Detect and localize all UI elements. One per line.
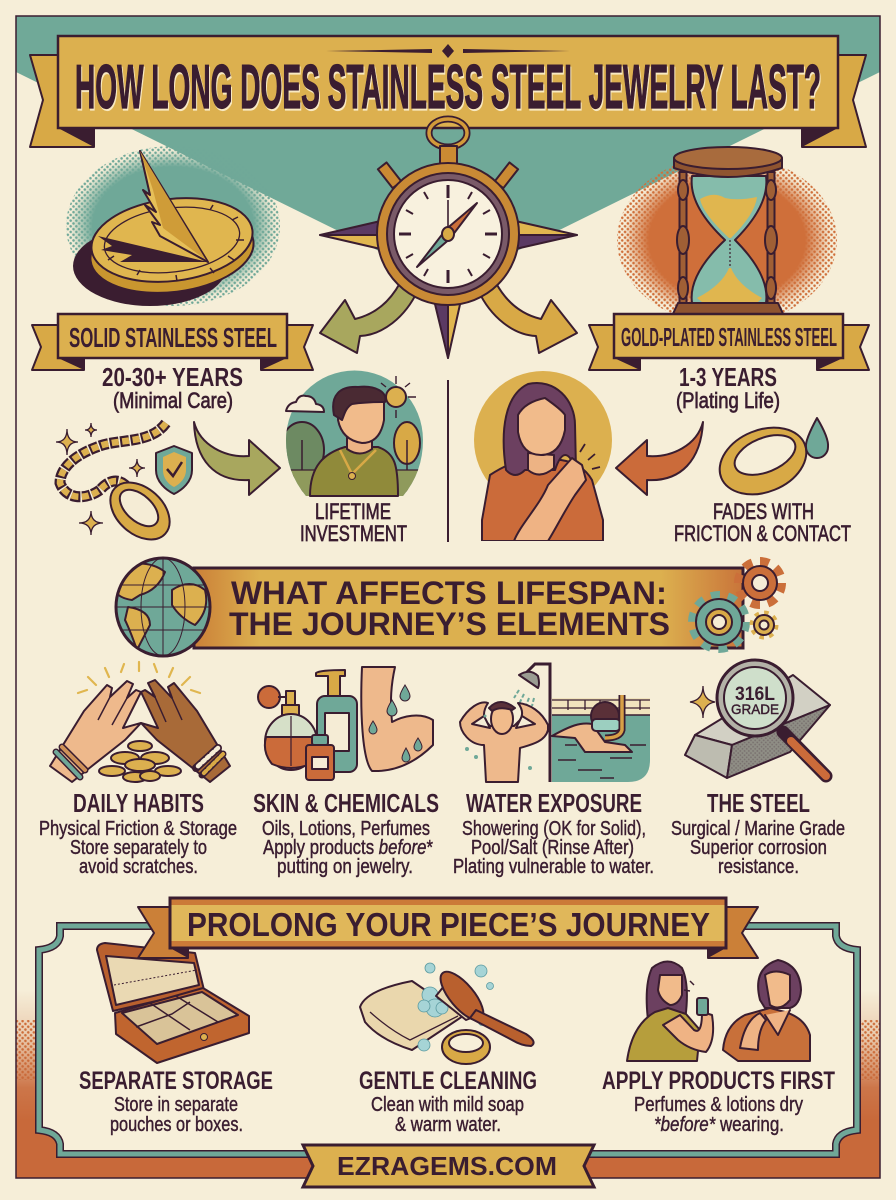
section banner: what affects lifespan: THE JOURNEY’S ELEMENTS xyxy=(229,606,670,642)
description: Superior corrosion xyxy=(690,836,827,859)
hands xyxy=(444,203,477,236)
description xyxy=(671,817,845,878)
heading: DAILY HABITS xyxy=(73,788,204,818)
label: lifetime investment: LIFETIME xyxy=(315,499,391,524)
compass points xyxy=(320,220,577,358)
illustration: woman touching shoulder xyxy=(474,371,612,541)
icon: perfume, lotion and arm xyxy=(258,667,433,780)
panel frame xyxy=(39,926,857,1154)
glass xyxy=(692,176,766,303)
description: Apply products before* xyxy=(263,836,433,859)
description: putting on jewelry. xyxy=(277,855,413,878)
arrow: orange to woman xyxy=(616,422,703,495)
icon: globe xyxy=(115,558,210,656)
icon: ingot and magnifier: GRADE xyxy=(731,701,779,717)
description xyxy=(262,817,433,878)
tip: gentle cleaning xyxy=(359,1067,537,1136)
factor: water exposure xyxy=(453,664,654,878)
description: Physical Friction & Storage xyxy=(39,817,237,840)
banner body xyxy=(58,36,838,128)
banner: gold-plated stainless steel xyxy=(589,314,869,370)
icon: shower and pool xyxy=(460,664,650,782)
tip: separate storage xyxy=(79,1067,273,1136)
tip: apply products first: *before* wearing. xyxy=(654,1113,784,1136)
left duration text: 20-30+ YEARS xyxy=(102,362,243,392)
section banner: what affects lifespan: WHAT AFFECTS LIFESPAN: xyxy=(231,575,667,611)
icon: hands and coins xyxy=(50,662,230,782)
banner: prolong: PROLONG YOUR PIECE’S JOURNEY xyxy=(187,906,710,943)
caps xyxy=(674,158,782,177)
tip: separate storage: pouches or boxes. xyxy=(110,1113,243,1136)
tip: gentle cleaning: GENTLE CLEANING xyxy=(359,1067,537,1095)
label: lifetime investment: INVESTMENT xyxy=(300,521,407,546)
tip: gentle cleaning: Clean with mild soap xyxy=(371,1093,524,1116)
heading: SKIN & CHEMICALS xyxy=(253,788,439,818)
icon: chain, ring, shield and sparkles xyxy=(56,423,192,551)
dial ticks xyxy=(399,185,497,283)
panel: prolong your piece's journey xyxy=(39,898,857,1154)
factor: the steel xyxy=(671,660,845,878)
ornament xyxy=(326,44,570,58)
icon: cloth, brush and ring xyxy=(360,963,534,1064)
description: resistance. xyxy=(718,855,799,878)
illustration: two women applying products xyxy=(627,960,810,1061)
heading: THE STEEL xyxy=(707,788,810,818)
left duration text xyxy=(102,362,243,413)
arrow: olive left xyxy=(320,283,418,353)
description: Surgical / Marine Grade xyxy=(671,817,845,840)
banner tails xyxy=(30,55,866,147)
tip: apply products first xyxy=(602,1067,835,1136)
icon: ingot and magnifier: 316L xyxy=(735,684,775,705)
factor: daily habits xyxy=(39,662,237,878)
orange lower side bands xyxy=(16,990,880,1178)
description: Showering (OK for Solid), xyxy=(462,817,646,840)
tip: gentle cleaning: & warm water. xyxy=(395,1113,501,1136)
description: Oils, Lotions, Perfumes xyxy=(262,817,430,840)
banner: solid stainless steel: SOLID STAINLESS STEEL xyxy=(69,322,277,353)
description: Store separately to xyxy=(70,836,207,859)
description: Pool/Salt (Rinse After) xyxy=(471,836,634,859)
icon: hourglass xyxy=(617,147,837,325)
icon: sundial xyxy=(66,146,280,306)
right duration text: (Plating Life) xyxy=(676,388,780,413)
right duration text: 1-3 YEARS xyxy=(679,362,777,392)
tip: apply products first: Perfumes & lotions dry xyxy=(634,1093,804,1116)
label: fades with friction xyxy=(674,499,851,546)
banner: solid stainless steel xyxy=(32,314,313,370)
footer banner: ezragems.com xyxy=(303,1145,594,1187)
description xyxy=(39,817,237,878)
description: avoid scratches. xyxy=(79,855,198,878)
label: fades with friction: FADES WITH xyxy=(713,499,814,524)
icon: ingot and magnifier xyxy=(685,660,830,778)
right duration text xyxy=(676,362,780,413)
icon: stopwatch with compass star xyxy=(320,119,577,358)
arrow: olive to lifetime xyxy=(194,422,280,495)
heading: WATER EXPOSURE xyxy=(466,788,642,818)
teal top chevron xyxy=(16,16,880,285)
icon: gears xyxy=(695,564,779,646)
description: Plating vulnerable to water. xyxy=(453,855,654,878)
label: lifetime investment xyxy=(300,499,407,546)
title banner xyxy=(30,36,866,147)
illustration: man in landscape xyxy=(280,370,424,497)
banner: prolong xyxy=(138,898,758,958)
wooden posts xyxy=(677,172,777,306)
left duration text: (Minimal Care) xyxy=(113,388,233,413)
arrow: gold right xyxy=(478,283,577,353)
factor: skin and chemicals xyxy=(253,667,439,878)
footer banner: ezragems.com: EZRAGEMS.COM xyxy=(337,1151,557,1181)
case xyxy=(377,163,519,305)
icon: jewelry box xyxy=(97,943,249,1063)
description xyxy=(453,817,654,878)
tip: separate storage: Store in separate xyxy=(114,1093,238,1116)
icon: fading ring and drop xyxy=(710,415,828,507)
loop and crown xyxy=(429,119,467,147)
tip: separate storage: SEPARATE STORAGE xyxy=(79,1067,273,1095)
section banner: what affects lifespan xyxy=(194,568,743,648)
